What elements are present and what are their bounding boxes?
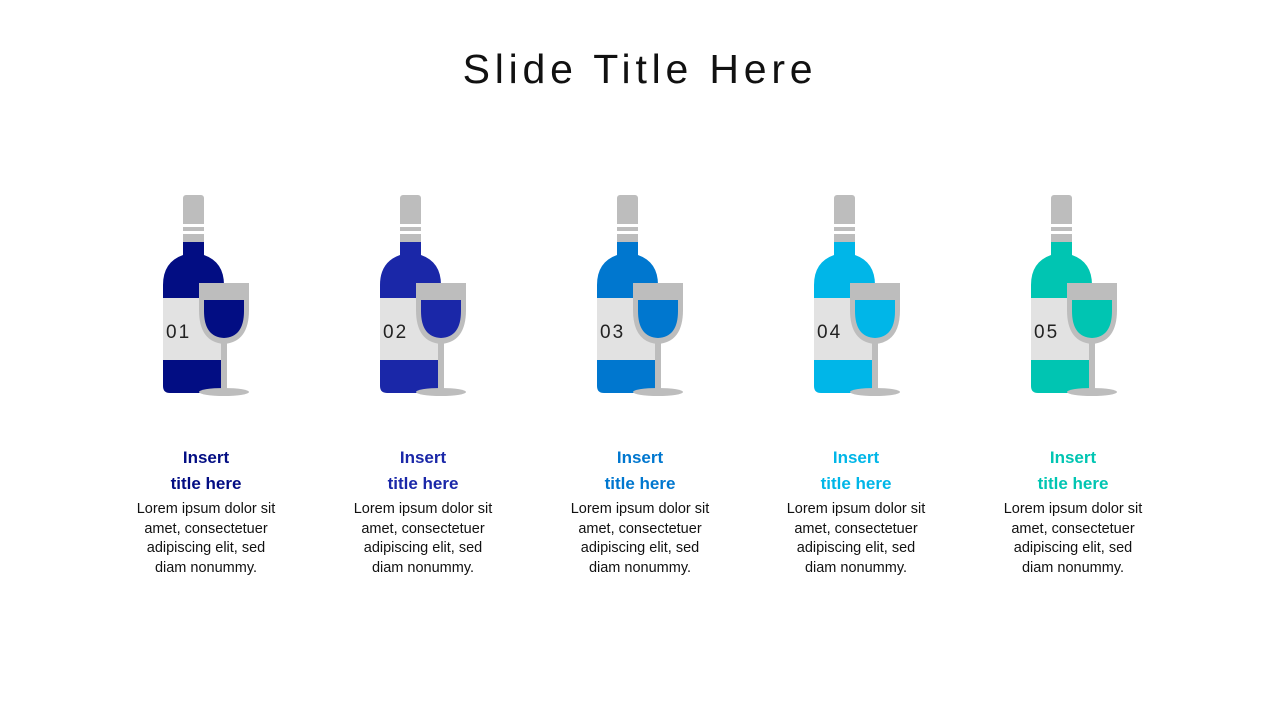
caption 4: Insert xyxy=(833,448,879,467)
caption 2: title here xyxy=(388,474,458,493)
caption 4 xyxy=(787,448,926,576)
caption 2: Lorem ipsum dolor sit amet, consectetuer adipiscing elit, sed diam nonummy. xyxy=(354,501,492,576)
caption 1 xyxy=(137,448,276,576)
caption 5: Lorem ipsum dolor sit amet, consectetuer adipiscing elit, sed diam nonummy. xyxy=(1004,501,1142,576)
caption 3: Lorem ipsum dolor sit amet, consectetuer adipiscing elit, sed diam nonummy. xyxy=(571,501,709,576)
bottle 01: 01 xyxy=(166,322,191,343)
bottle 02 xyxy=(380,195,466,396)
caption 5 xyxy=(1004,448,1142,576)
title: Slide Title Here xyxy=(463,46,817,92)
bottle 05 xyxy=(1031,195,1117,396)
caption 3 xyxy=(571,448,710,576)
bottle 03: 03 xyxy=(600,322,625,343)
bottle 04 xyxy=(814,195,900,396)
bottle 03 xyxy=(597,195,683,396)
bottle 04: 04 xyxy=(817,322,842,343)
bottle 02: 02 xyxy=(383,322,408,343)
caption 5: Insert xyxy=(1050,448,1096,467)
caption 2: Insert xyxy=(400,448,446,467)
caption 1: Lorem ipsum dolor sit amet, consectetuer adipiscing elit, sed diam nonummy. xyxy=(137,501,275,576)
bottle 01 xyxy=(163,195,249,396)
caption 1: title here xyxy=(171,474,241,493)
caption 4: Lorem ipsum dolor sit amet, consectetuer adipiscing elit, sed diam nonummy. xyxy=(787,501,925,576)
bottle 05: 05 xyxy=(1034,322,1059,343)
caption 3: Insert xyxy=(617,448,663,467)
caption 1: Insert xyxy=(183,448,229,467)
caption 3: title here xyxy=(605,474,675,493)
caption 5: title here xyxy=(1038,474,1108,493)
caption 2 xyxy=(354,448,492,576)
caption 4: title here xyxy=(821,474,891,493)
